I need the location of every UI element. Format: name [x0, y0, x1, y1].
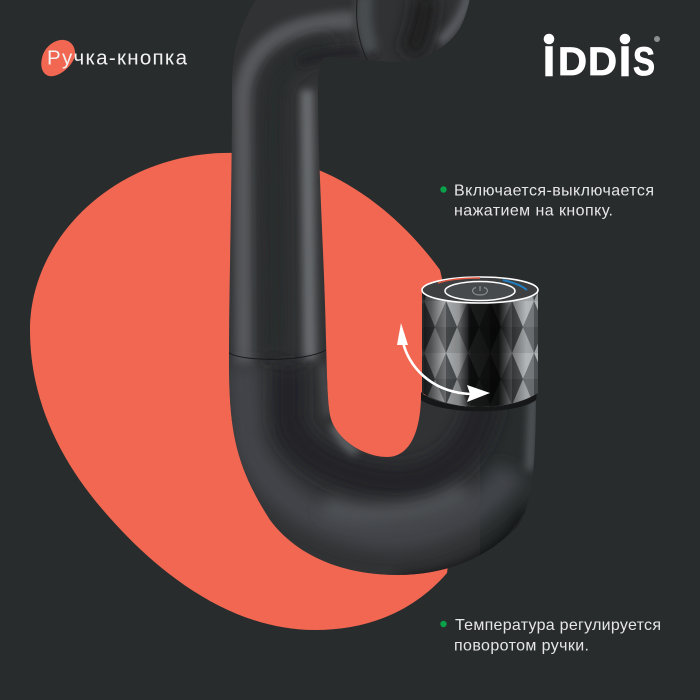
seam lines	[229, 350, 326, 359]
heading: Ручка-кнопка	[41, 40, 188, 76]
callout: button press: Включается-выключается	[454, 182, 654, 200]
logo: IDDIS: D	[588, 40, 617, 84]
logo: IDDIS: I	[620, 40, 630, 84]
knob: faceted handle	[420, 277, 540, 410]
U-bend shading	[243, 365, 533, 584]
faucet body	[220, 0, 533, 585]
callout: temperature	[440, 617, 661, 654]
knob cap	[422, 277, 538, 303]
callout: temperature: поворотом ручки.	[454, 638, 589, 654]
logo: IDDIS: I	[544, 40, 554, 84]
logo: IDDIS: D	[558, 40, 587, 84]
knob collar	[421, 392, 537, 411]
callout: temperature: Температура регулируется	[455, 617, 661, 634]
logo: IDDIS: S	[633, 40, 655, 84]
upper pipe shading	[243, 0, 468, 365]
arrow: rotation direction	[397, 323, 490, 402]
callout: button press: нажатием на кнопку.	[454, 202, 613, 220]
heading: Ручка-кнопка: Ручка-кнопка	[47, 46, 188, 70]
callout: button press	[440, 182, 654, 220]
coral blob shape	[30, 153, 470, 630]
logo: IDDIS	[544, 34, 660, 84]
